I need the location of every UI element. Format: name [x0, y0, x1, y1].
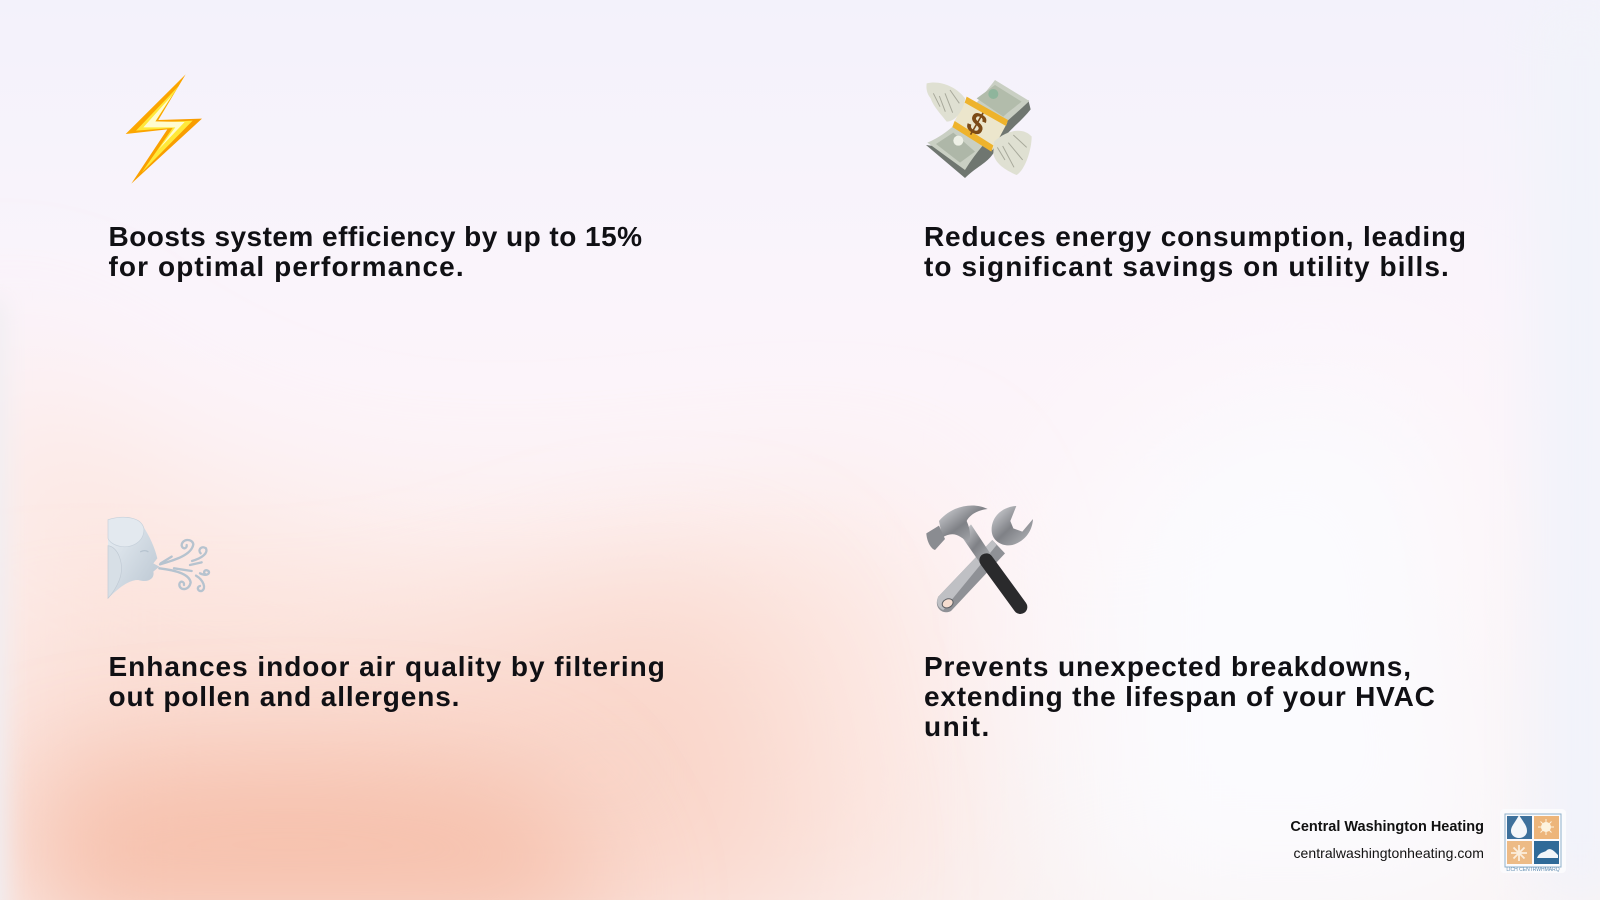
heading: savings benefit: Reduces energy consumption, leading: [924, 221, 1467, 252]
footer: company name: Central Washington Heating: [1290, 819, 1484, 835]
heading: air quality benefit: Enhances indoor air quality by filtering: [108, 651, 666, 682]
heading: air quality benefit: [108, 651, 666, 712]
heading: air quality benefit: out pollen and allergens.: [108, 681, 460, 712]
heading: efficiency benefit: Boosts system efficiency by up to 15%: [108, 221, 642, 252]
icon: money with wings: $: [961, 105, 993, 143]
footer: website: centralwashingtonheating.com: [1293, 845, 1484, 861]
heading: savings benefit: [924, 221, 1467, 282]
heading: efficiency benefit: [108, 221, 642, 282]
heading: savings benefit: to significant savings on utility bills.: [924, 251, 1450, 282]
heading: reliability benefit: Prevents unexpected breakdowns,: [924, 651, 1412, 682]
heading: reliability benefit: unit.: [924, 711, 991, 742]
heading: efficiency benefit: for optimal performance.: [108, 251, 465, 282]
logo: LICH CENTRWHMARQ: [1506, 867, 1560, 873]
heading: reliability benefit: extending the lifespan of your HVAC: [924, 681, 1436, 712]
heading: reliability benefit: [924, 651, 1436, 742]
